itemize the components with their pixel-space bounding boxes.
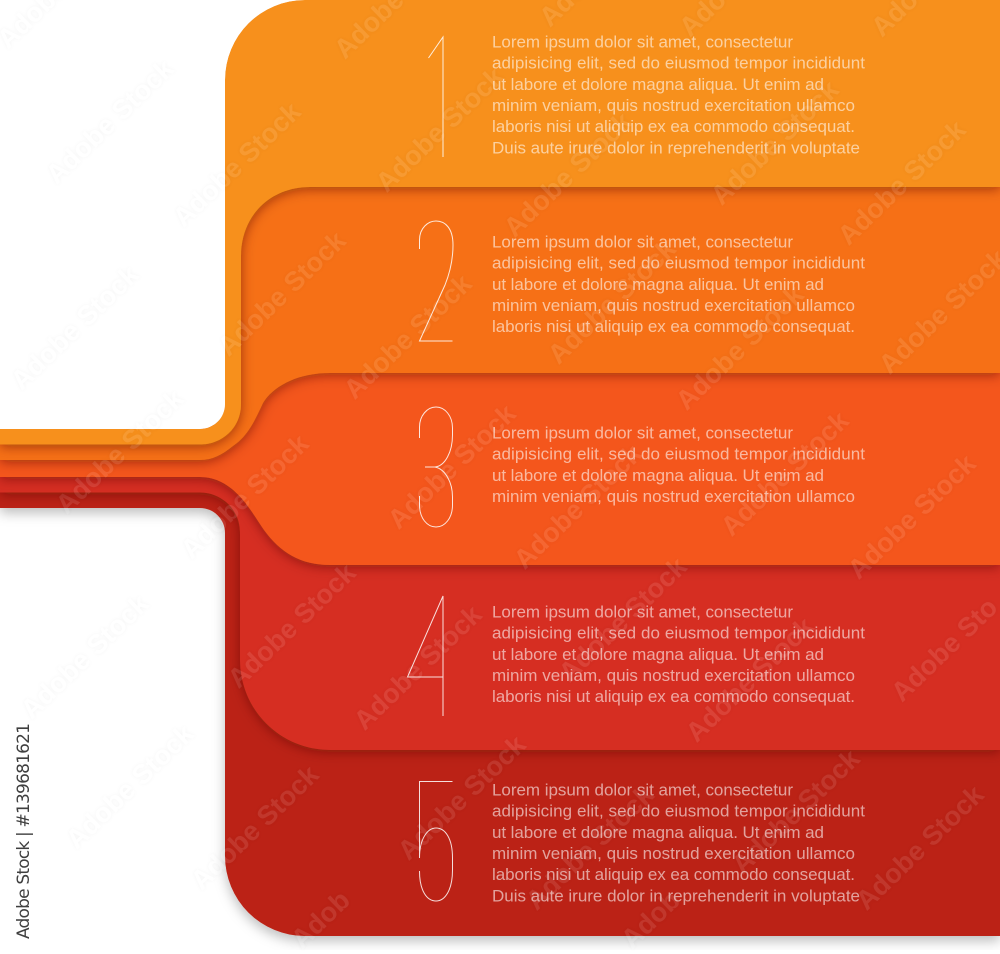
step 4 text (492, 602, 865, 706)
watermarks: Adobe Stock (832, 114, 972, 251)
step 3 text: adipisicing elit, sed do eiusmod tempor incididunt (492, 444, 865, 464)
panel: step 4 (0, 470, 1000, 750)
watermarks: Adobe Stock (508, 438, 648, 575)
step 3 text: ut labore et dolore magna aliqua. Ut enim ad (492, 466, 824, 485)
watermarks: Adobe Stock (167, 96, 307, 233)
step 1 text: adipisicing elit, sed do eiusmod tempor incididunt (492, 54, 865, 72)
step 3 text: minim veniam, quis nostrud exercitation ullamco (492, 487, 855, 506)
watermarks: Adobe Stock (850, 779, 990, 916)
watermarks: Adobe Stock (175, 428, 315, 565)
step 2 text: minim veniam, quis nostrud exercitation ullamco (492, 296, 855, 315)
numeral 5 (420, 782, 452, 901)
step 1 text: minim veniam, quis nostrud exercitation ullamco (492, 96, 855, 115)
watermarks: Adobe Stock (680, 611, 820, 748)
watermarks: Adobe Stock (222, 557, 362, 694)
watermarks: Adobe Stock (520, 779, 660, 916)
watermarks: Adobe Stock (348, 599, 488, 736)
step 2 text: ut labore et dolore magna aliqua. Ut enim ad (492, 275, 824, 294)
band 4 shape (0, 470, 1000, 750)
panel: step 2 (0, 180, 1000, 460)
numeral 1 (428, 37, 443, 157)
watermarks: Adobe Stock (392, 729, 532, 866)
step 1 text: Lorem ipsum dolor sit amet, consectetur (492, 32, 793, 52)
watermarks: Adobe Stock (842, 448, 982, 585)
step 3 text: Lorem ipsum dolor sit amet, consectetur (492, 424, 793, 442)
numeral 3 (420, 407, 452, 527)
watermarks: Adobe Stock (670, 279, 810, 416)
watermarks: Adobe Stock (185, 759, 325, 896)
watermarks: Adobe Stock (50, 383, 190, 520)
watermarks: Adobe Stock (715, 405, 855, 542)
step 5 text: Duis aute irure dolor in reprehenderit in voluptate (492, 886, 860, 906)
step 1 text: ut labore et dolore magna aliqua. Ut enim ad (492, 75, 824, 94)
watermarks: Adobe Stock (60, 718, 200, 855)
step 2 text: adipisicing elit, sed do eiusmod tempor incididunt (492, 254, 865, 272)
step 3 text (492, 424, 865, 506)
watermarks: Adobe Stock (382, 398, 522, 535)
panel: step 1 (0, 0, 1000, 444)
step 5 text (492, 780, 865, 906)
stacked bands clipped to silhouette (0, 0, 1000, 750)
step 4 text: ut labore et dolore magna aliqua. Ut enim ad (492, 645, 824, 664)
step 5 text: ut labore et dolore magna aliqua. Ut enim ad (492, 823, 824, 842)
watermarks: Adobe Stock (15, 588, 155, 725)
panel: step 5 (0, 485, 1000, 936)
watermarks: Adobe Stock (542, 233, 682, 370)
band 1 shape (0, 0, 1000, 444)
step 1 text: laboris nisi ut aliquip ex ea commodo consequat. (492, 117, 855, 136)
panel: step 3 (0, 360, 1000, 565)
band 5 shape (0, 485, 1000, 936)
watermarks: Adobe Stock (212, 225, 352, 362)
step 4 text: Lorem ipsum dolor sit amet, consectetur (492, 602, 793, 622)
watermarks: Adobe Stock (370, 61, 510, 198)
step 1 text: Duis aute irure dolor in reprehenderit in voluptate (492, 138, 860, 158)
step 5 text: minim veniam, quis nostrud exercitation ullamco (492, 844, 855, 863)
watermarks: Adobe Sto (885, 592, 1000, 707)
watermarks: Adobe Stock (5, 259, 145, 396)
watermarks: Adobe Stock (338, 268, 478, 405)
numeral 4 (408, 596, 443, 716)
watermarks: Adobe Stock (553, 551, 693, 688)
watermarks: Adobe Stock (40, 53, 180, 190)
watermarks: Adobe Stock (498, 106, 638, 243)
step 4 text: minim veniam, quis nostrud exercitation ullamco (492, 666, 855, 685)
step 5 text: adipisicing elit, sed do eiusmod tempor incididunt (492, 802, 865, 820)
step 4 text: adipisicing elit, sed do eiusmod tempor incididunt (492, 624, 865, 642)
band 3 shape (0, 360, 1000, 565)
watermarks: Adob (285, 885, 356, 954)
step 2 text (492, 232, 865, 336)
vertical stock id label: Adobe Stock | #139681621 (14, 723, 34, 939)
step 1 text (492, 32, 865, 158)
step 4 text: laboris nisi ut aliquip ex ea commodo consequat. (492, 687, 855, 706)
numeral 2 (420, 221, 453, 341)
step 5 text: laboris nisi ut aliquip ex ea commodo consequat. (492, 865, 855, 884)
watermarks: Adob (615, 885, 686, 954)
watermarks: Adobe Stock (705, 74, 845, 211)
watermarks: Adobe Stock (726, 743, 866, 880)
step 2 text: laboris nisi ut aliquip ex ea commodo consequat. (492, 317, 855, 336)
step 5 text: Lorem ipsum dolor sit amet, consectetur (492, 780, 793, 800)
band 2 shape (0, 180, 1000, 460)
step 2 text: Lorem ipsum dolor sit amet, consectetur (492, 232, 793, 252)
